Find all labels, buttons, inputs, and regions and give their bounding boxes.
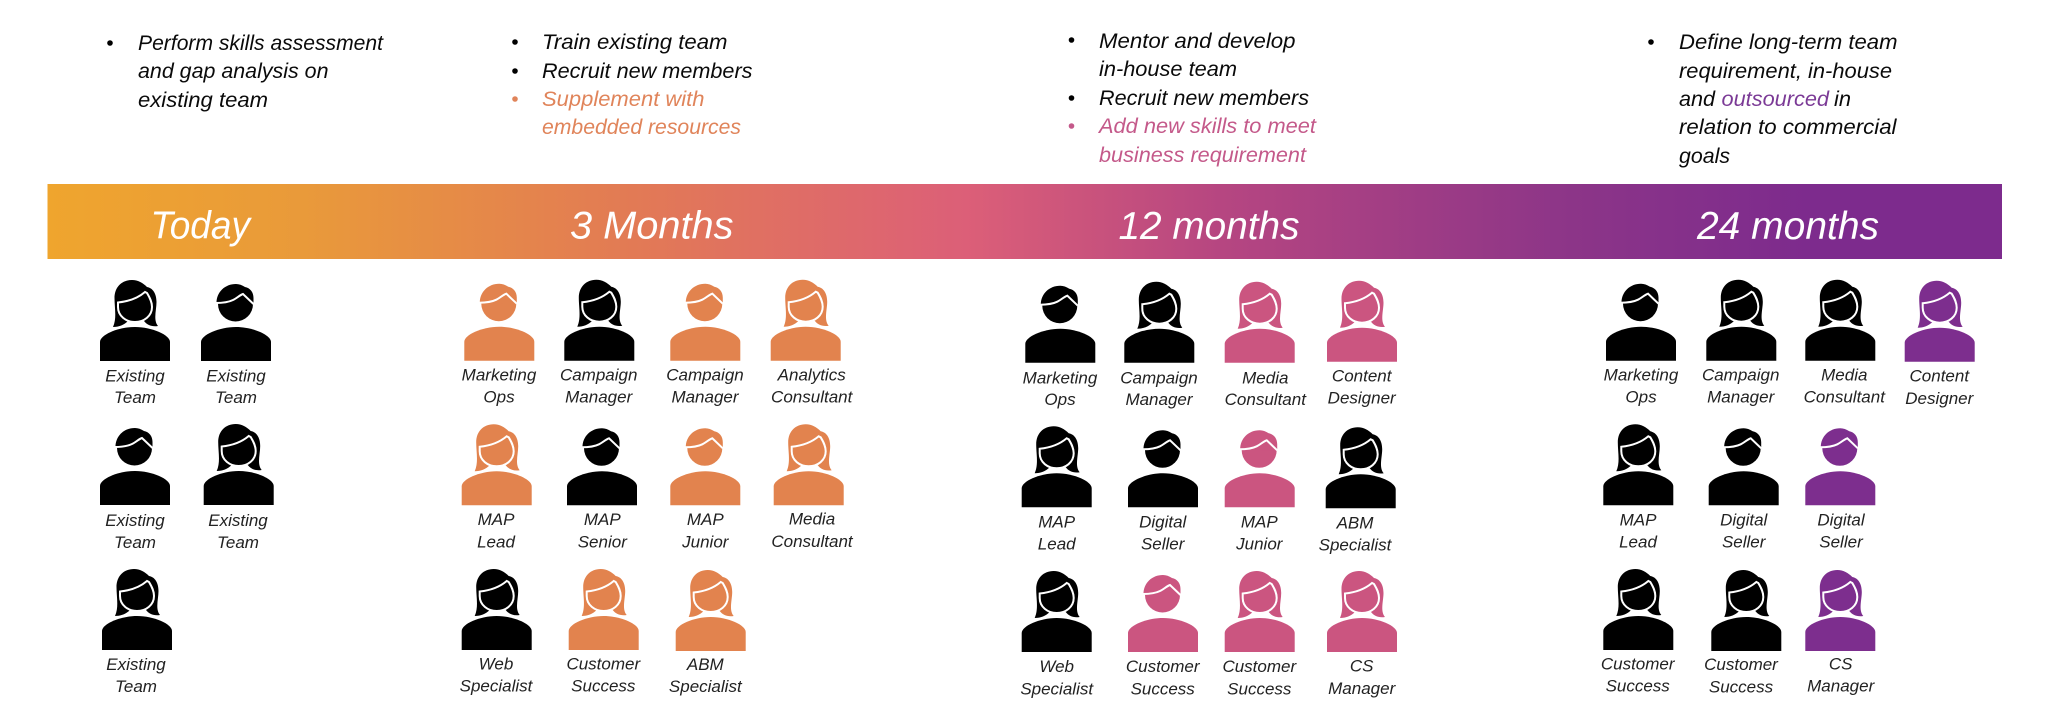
person: Campaign Manager: Manager	[671, 388, 740, 407]
bullet list: 12 months: business requirement	[1099, 144, 1307, 167]
person: MAP Lead: Lead	[477, 533, 515, 552]
bullet list: 24 months: relation to commercial	[1679, 116, 1898, 139]
person: Customer Success: Success	[1709, 678, 1774, 697]
person: Customer Success	[566, 569, 641, 696]
person: MAP Junior	[670, 428, 740, 552]
person: Marketing Ops: Marketing	[1023, 368, 1098, 387]
person: Web Specialist: Web	[479, 654, 513, 673]
person: Media Consultant: Consultant	[771, 532, 854, 551]
heading: 12 months: 12 months	[1118, 205, 1300, 248]
person: Digital Seller: Digital	[1139, 512, 1188, 531]
person: MAP Lead	[1022, 426, 1092, 553]
person: MAP Lead: Lead	[1038, 534, 1076, 553]
person: Customer Success: Success	[1227, 680, 1292, 699]
person: Digital Seller: Seller	[1722, 533, 1767, 552]
person: Customer Success: Customer	[566, 654, 641, 673]
person: ABM Specialist	[669, 570, 746, 696]
bullet list: 12 months: in-house team	[1099, 58, 1237, 81]
person: Campaign Manager: Manager	[565, 388, 634, 407]
person: Campaign Manager: Campaign	[1120, 368, 1198, 387]
person: Marketing Ops	[462, 284, 537, 407]
person: Marketing Ops: Marketing	[1604, 366, 1679, 385]
person: Customer Success	[1222, 571, 1297, 699]
bullet list: 24 months: Define long-term team	[1679, 31, 1898, 54]
person: Existing Team: Existing	[105, 367, 165, 386]
person: Existing Team: Existing	[206, 367, 266, 386]
person: MAP Senior: MAP	[584, 510, 621, 529]
bullet list: 24 months: outsourced	[1722, 88, 1830, 111]
person: Existing Team: Team	[115, 677, 157, 696]
bullet list: 24 months: in	[1834, 88, 1851, 111]
person: Customer Success	[1126, 575, 1201, 699]
person: CS Manager	[1805, 570, 1876, 696]
person: MAP Junior: Junior	[1235, 534, 1284, 553]
bullet list: today	[107, 32, 384, 112]
person: CS Manager: Manager	[1328, 679, 1397, 698]
person: MAP Lead: MAP	[478, 510, 515, 529]
person: Customer Success: Success	[1606, 677, 1670, 696]
person: Content Designer: Designer	[1328, 388, 1397, 407]
person: Media Consultant: Consultant	[1804, 388, 1886, 407]
panel: 3 months actions	[512, 31, 753, 139]
person: Marketing Ops: Ops	[483, 388, 515, 407]
person: Web Specialist: Specialist	[460, 677, 534, 696]
person: Content Designer	[1327, 281, 1397, 407]
person: Content Designer: Content	[1332, 367, 1393, 386]
person: Campaign Manager	[560, 280, 637, 407]
person: Customer Success: Success	[571, 677, 636, 696]
bullet list: 24 months: requirement, in-house	[1679, 60, 1892, 83]
person: Existing Team	[102, 569, 172, 696]
person: Marketing Ops	[1023, 286, 1098, 409]
person: MAP Junior: Junior	[681, 533, 730, 552]
person: ABM Specialist: Specialist	[669, 677, 743, 696]
person: Campaign Manager: Campaign	[1702, 366, 1779, 385]
person: Customer Success: Success	[1131, 680, 1195, 699]
person: Customer Success: Customer	[1704, 655, 1779, 674]
person: Content Designer: Content	[1910, 367, 1970, 386]
person: CS Manager: CS	[1350, 656, 1374, 675]
person: Existing Team	[100, 280, 170, 407]
person: Digital Seller: Digital	[1817, 511, 1866, 530]
person: MAP Junior: MAP	[1241, 512, 1278, 531]
person: Existing Team: Team	[114, 388, 156, 407]
person: MAP Senior	[567, 428, 637, 552]
person: Existing Team: Existing	[208, 511, 268, 530]
bullet list: 3 months: Train existing team	[542, 31, 728, 54]
person: ABM Specialist: Specialist	[1319, 536, 1393, 555]
person: Web Specialist: Specialist	[1020, 680, 1094, 699]
person: Media Consultant: Consultant	[1225, 390, 1307, 409]
person: Content Designer: Designer	[1905, 389, 1975, 408]
person: Web Specialist	[460, 569, 534, 696]
person: Marketing Ops: Marketing	[462, 366, 537, 385]
person: Existing Team	[204, 424, 274, 552]
person: Content Designer	[1905, 281, 1975, 408]
person: Customer Success	[1601, 569, 1676, 696]
bullet list: 3 months: Recruit new members	[542, 60, 753, 83]
person: Digital Seller: Seller	[1819, 533, 1864, 552]
bullet list: today: existing team	[138, 89, 268, 112]
person: Marketing Ops: Ops	[1625, 388, 1657, 407]
person: Marketing Ops: Ops	[1044, 390, 1076, 409]
person: MAP Lead: Lead	[1619, 533, 1657, 552]
person: Media Consultant	[1804, 280, 1886, 407]
person: Digital Seller	[1805, 428, 1875, 552]
person: MAP Lead	[462, 424, 532, 552]
panel: today actions	[107, 32, 384, 112]
person: Existing Team	[100, 428, 170, 552]
bullet list: 12 months: Add new skills to meet	[1097, 115, 1317, 138]
person: Existing Team	[201, 284, 271, 407]
person: Existing Team: Team	[114, 533, 156, 552]
bullet list: 24 months: and	[1679, 88, 1716, 111]
person: Analytics Consultant: Analytics	[777, 366, 846, 385]
team grid: 12 months	[1020, 281, 1397, 699]
person: Web Specialist	[1020, 571, 1094, 699]
person: CS Manager: CS	[1829, 654, 1853, 673]
person: ABM Specialist: ABM	[1336, 513, 1374, 532]
bullet list: today: and gap analysis on	[138, 60, 328, 83]
panel: 12 months actions	[1069, 30, 1317, 167]
person: Campaign Manager: Campaign	[666, 366, 744, 385]
person: Media Consultant: Media	[789, 509, 835, 528]
person: Existing Team: Existing	[106, 655, 166, 674]
panel: 24 months actions	[1648, 31, 1898, 168]
person: MAP Junior	[1225, 430, 1295, 553]
bullet list: 24 months: goals	[1679, 145, 1731, 168]
person: Customer Success: Customer	[1222, 657, 1297, 676]
person: Campaign Manager: Manager	[1125, 390, 1194, 409]
person: Customer Success: Customer	[1601, 654, 1676, 673]
team grid: 24 months	[1601, 280, 1975, 697]
person: MAP Lead	[1603, 424, 1673, 552]
person: Customer Success: Customer	[1126, 657, 1201, 676]
heading: 3 Months: 3 Months	[570, 205, 734, 248]
bullet list: 3 months: embedded resources	[542, 116, 741, 139]
bullet list: 12 months	[1069, 30, 1317, 167]
timeline gradient bar	[48, 184, 2002, 259]
person: Customer Success	[1704, 570, 1781, 697]
person: Media Consultant	[1225, 282, 1307, 409]
bullet list: 12 months: Recruit new members	[1099, 87, 1310, 110]
bullet list: 3 months: Supplement with	[542, 88, 704, 111]
person: Media Consultant: Media	[1242, 368, 1288, 387]
person: Marketing Ops	[1604, 284, 1679, 407]
person: Existing Team: Team	[217, 533, 259, 552]
person: Web Specialist: Web	[1039, 657, 1074, 676]
team grid: today	[100, 280, 274, 696]
person: Digital Seller	[1128, 430, 1198, 553]
person: Digital Seller: Digital	[1720, 511, 1769, 530]
person: Campaign Manager	[666, 284, 744, 407]
person: Campaign Manager	[1120, 282, 1198, 409]
bullet list: 24 months	[1648, 31, 1898, 168]
person: Campaign Manager: Manager	[1707, 388, 1776, 407]
person: CS Manager	[1327, 571, 1397, 698]
person: Media Consultant	[771, 424, 854, 551]
person: MAP Junior: MAP	[687, 510, 724, 529]
team grid: 3 months	[460, 280, 854, 696]
heading: 24 months: 24 months	[1696, 205, 1879, 248]
person: Analytics Consultant: Consultant	[771, 388, 854, 407]
person: MAP Lead: MAP	[1620, 511, 1657, 530]
person: Existing Team: Team	[215, 388, 257, 407]
bullet list: today: Perform skills assessment	[138, 32, 384, 55]
person: ABM Specialist: ABM	[686, 655, 725, 674]
person: Digital Seller: Seller	[1141, 534, 1186, 553]
person: Campaign Manager	[1702, 280, 1779, 407]
person: MAP Lead: MAP	[1038, 512, 1076, 531]
person: Campaign Manager: Campaign	[560, 366, 637, 385]
person: ABM Specialist	[1319, 427, 1396, 555]
person: Existing Team: Existing	[105, 511, 165, 530]
person: MAP Senior: Senior	[578, 533, 628, 552]
person: Digital Seller	[1709, 428, 1779, 552]
person: Analytics Consultant	[771, 280, 854, 407]
person: Media Consultant: Media	[1821, 366, 1867, 385]
bullet list: 3 months	[512, 31, 753, 139]
heading: Today: Today	[150, 205, 252, 248]
person: CS Manager: Manager	[1807, 677, 1876, 696]
bullet list: 12 months: Mentor and develop	[1099, 30, 1296, 53]
